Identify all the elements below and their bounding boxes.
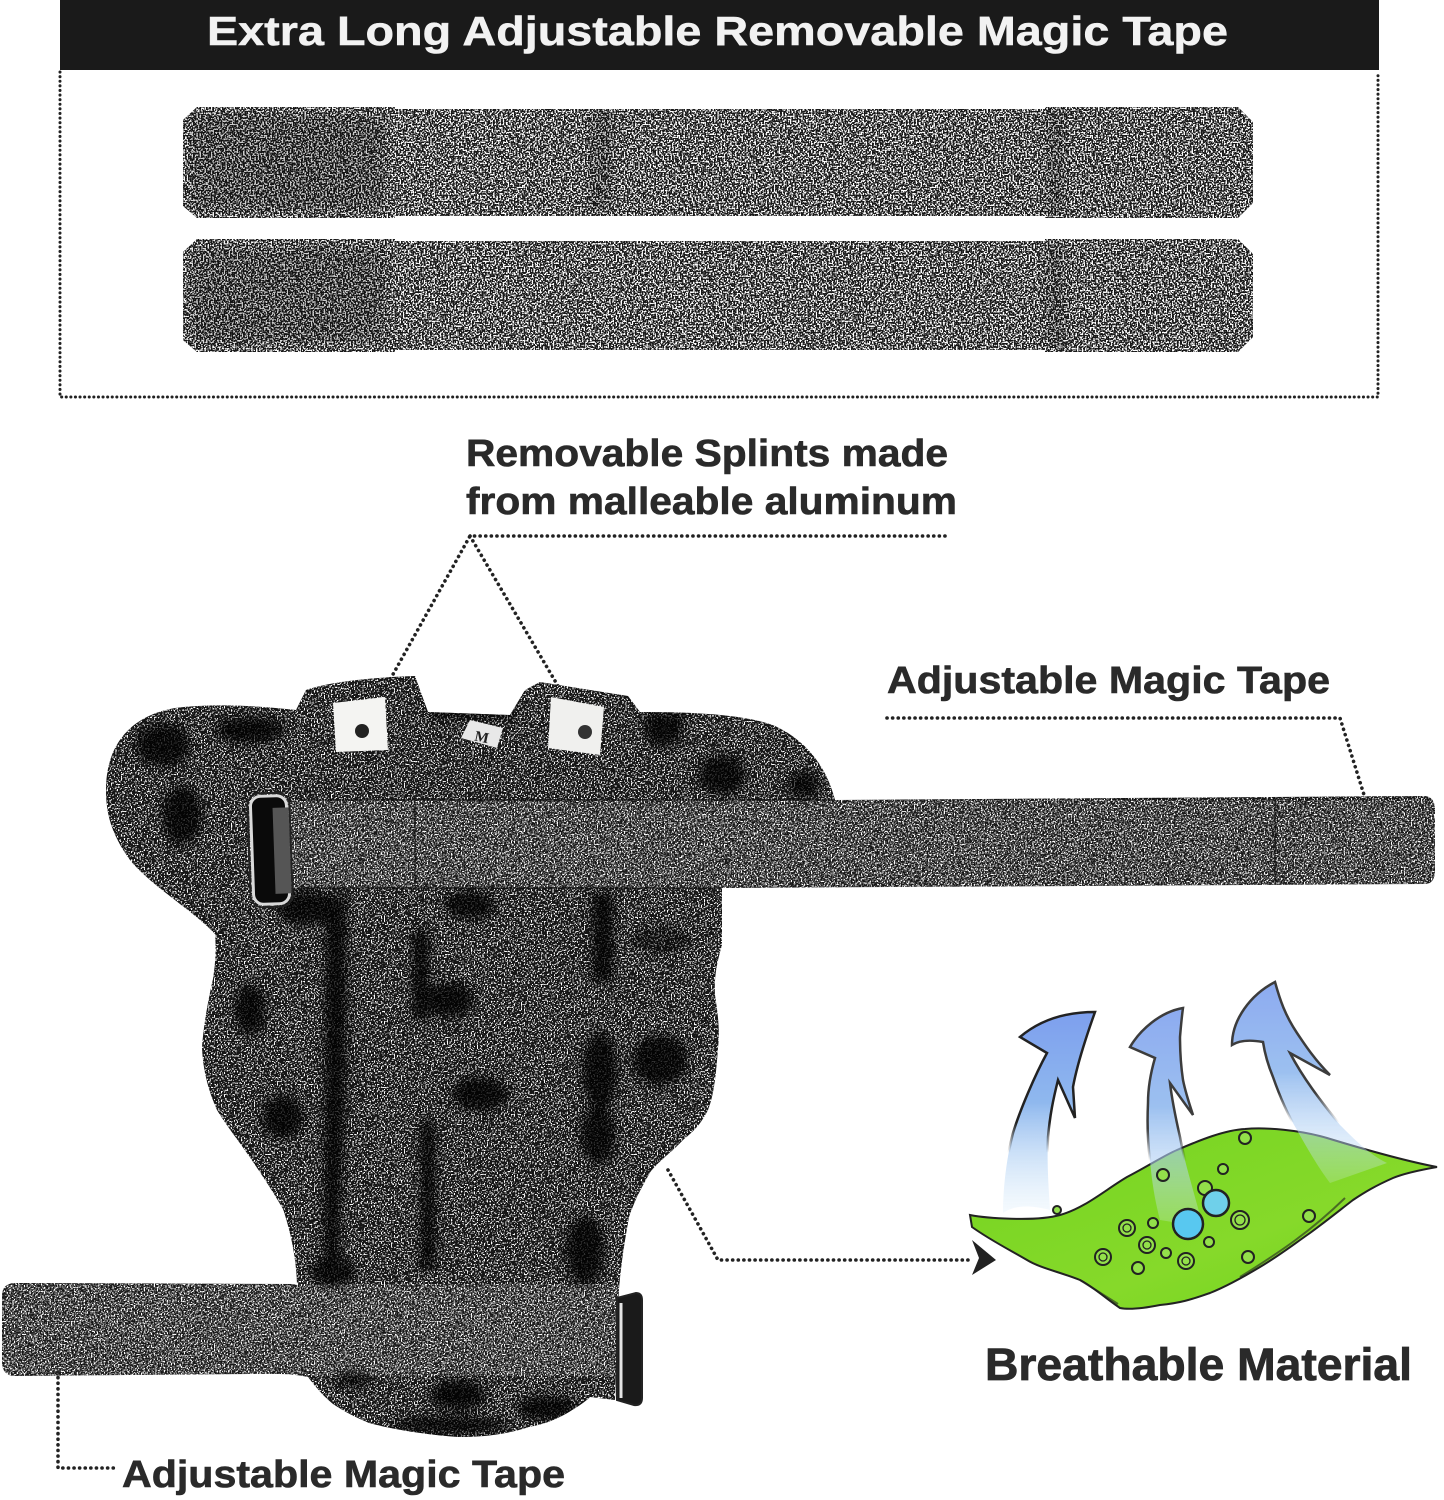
- title banner: [60, 0, 1379, 70]
- arrowhead to breathable material: [972, 1240, 996, 1275]
- air arrow 3: [1232, 982, 1387, 1183]
- lower extra long strap: [180, 236, 1256, 355]
- air arrow 2: [1130, 1008, 1203, 1227]
- strap edge seams: [300, 797, 1275, 888]
- bottom strap lighter weave: [0, 1284, 620, 1376]
- wrist brace: [0, 670, 1440, 1460]
- breathable material illustration: [970, 982, 1437, 1309]
- size tag: [461, 720, 503, 748]
- splint window left: [333, 697, 388, 752]
- splint anchor dots: [355, 724, 592, 739]
- breathing holes: [1053, 1132, 1315, 1274]
- leader line: top tape: [887, 718, 1365, 798]
- leader lines: splints: [362, 536, 945, 732]
- splint window right: [548, 697, 604, 755]
- dotted frame around straps: [60, 72, 1378, 397]
- title banner: Extra Long Adjustable Removable Magic Tape: [207, 8, 1228, 54]
- size tag: M: [473, 729, 490, 747]
- label: removable splints: from malleable aluminum: [466, 481, 957, 523]
- shading blotches: [135, 700, 820, 1434]
- label: breathable material: Breathable Material: [985, 1339, 1412, 1390]
- leader line: bottom tape: [58, 1372, 116, 1468]
- label: top adjustable magic tape: Adjustable Magic Tape: [887, 660, 1330, 702]
- top strap lighter weave: [272, 800, 1437, 888]
- leaf thickness edge: [1080, 1198, 1345, 1304]
- label: bottom adjustable magic tape: Adjustable Magic Tape: [122, 1454, 565, 1496]
- air arrow 1: [1003, 1012, 1095, 1213]
- lower buckle: [617, 1293, 642, 1405]
- upper extra long strap: [180, 104, 1256, 221]
- label: removable splints: Removable Splints made: [466, 433, 948, 475]
- label: removable splints: [466, 433, 957, 523]
- fabric leaf: [970, 1128, 1437, 1309]
- upper buckle: [247, 792, 293, 908]
- leader line: breathable: [668, 1170, 968, 1260]
- brace body with straps: [0, 670, 1440, 1460]
